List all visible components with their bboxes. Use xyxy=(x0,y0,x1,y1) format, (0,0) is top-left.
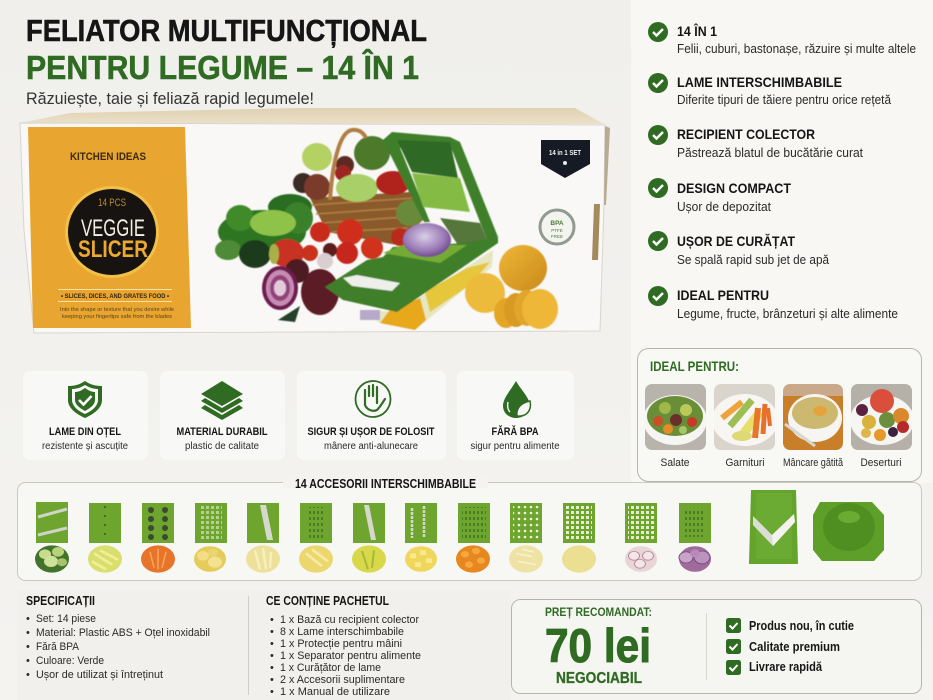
block: package contents: 1 x Separator pentru alimente xyxy=(280,650,421,662)
panel: ideal pentru xyxy=(638,348,922,482)
block: package contents xyxy=(266,594,421,698)
photo: cooked food xyxy=(783,384,843,450)
box top flap xyxy=(20,108,604,124)
card: durable material xyxy=(160,371,285,460)
box front xyxy=(20,123,605,333)
feature: collector xyxy=(648,125,864,160)
block: package contents: 8 x Lame interschimbabile xyxy=(280,626,404,638)
veggie slicer round logo xyxy=(65,186,159,278)
orange product label: keeping your fingertips safe from the blades xyxy=(62,314,173,320)
block: package contents: 1 x Curățător de lame xyxy=(280,662,381,674)
feature: 14 in 1: Felii, cuburi, bastonașe, răzuire și multe altele xyxy=(677,42,916,56)
feature: interchangeable blades xyxy=(648,73,891,107)
blade 10 xyxy=(510,503,542,543)
photo: desserts xyxy=(850,384,914,450)
panel: accessories xyxy=(18,477,922,580)
slicer lid xyxy=(383,132,498,240)
block: package contents: 1 x Bază cu recipient colector xyxy=(280,614,419,626)
food: yellow strips xyxy=(88,545,122,573)
badge: BPA PTFE free: FREE xyxy=(551,234,563,239)
feature: interchangeable blades: Diferite tipuri de tăiere pentru orice rețetă xyxy=(677,93,891,107)
negotiable label: NEGOCIABIL xyxy=(556,670,642,687)
feature: ideal for: IDEAL PENTRU xyxy=(677,287,769,303)
block: package contents: 2 x Accesorii suplimentare xyxy=(280,674,405,686)
veggie slicer round logo: SLICER xyxy=(78,236,148,263)
price value: 70 lei xyxy=(545,619,651,672)
food: yellow-green chunks xyxy=(352,545,386,573)
vegetables and basket illustration xyxy=(215,130,558,330)
title xyxy=(26,13,427,86)
block: package contents: • xyxy=(270,626,274,638)
product box photo xyxy=(20,108,610,333)
blade 7 xyxy=(353,503,385,543)
subtitle: Răzuiește, taie și feliază rapid legumele! xyxy=(26,89,314,108)
block: package contents: • xyxy=(270,650,274,662)
food: grated pale xyxy=(509,545,543,573)
panel: right column background xyxy=(631,0,933,483)
food: fine grated xyxy=(562,545,596,573)
red onions xyxy=(262,259,339,322)
purple onion xyxy=(403,223,451,257)
basket xyxy=(310,192,423,245)
basket greens xyxy=(293,136,410,202)
card: steel blades xyxy=(23,371,148,460)
card: durable material: plastic de calitate xyxy=(185,441,259,452)
feature: collector: Păstrează blatul de bucătărie curat xyxy=(677,146,864,160)
block: specifications: • xyxy=(26,669,30,681)
feature: easy to clean: UȘOR DE CURĂȚAT xyxy=(677,233,795,249)
icon: hand in circle xyxy=(356,381,390,417)
heading: ideal pentru: IDEAL PENTRU: xyxy=(650,358,739,374)
feature: ideal for xyxy=(648,286,898,321)
basket handle xyxy=(330,130,366,200)
card: safe and easy: mânere anti-alunecare xyxy=(324,441,418,452)
panel: feature cards xyxy=(23,371,574,460)
food: cubes xyxy=(405,546,437,572)
panel: specs and package xyxy=(17,590,511,700)
block: specifications: Set: 14 piese xyxy=(36,613,96,625)
food: potato slices xyxy=(194,546,226,572)
block: specifications: Culoare: Verde xyxy=(36,655,104,667)
heading: accessories: 14 ACCESORII INTERSCHIMBABILE xyxy=(295,477,476,491)
food: zucchini xyxy=(35,545,69,573)
orange product label: • SLICES, DICES, AND GRATES FOOD • xyxy=(61,293,170,300)
blade 8 xyxy=(405,503,437,543)
card: safe and easy: SIGUR ȘI UȘOR DE FOLOSIT xyxy=(308,426,435,438)
blade 6 xyxy=(300,503,332,543)
panel: price xyxy=(512,600,922,694)
block: specifications: Material: Plastic ABS + Oțel inoxidabil xyxy=(36,627,210,639)
benefit: fast delivery xyxy=(726,660,823,675)
block: specifications xyxy=(26,594,210,681)
food: onion rings xyxy=(625,546,657,572)
feature: easy to clean xyxy=(648,231,829,267)
blade 3 xyxy=(142,503,174,543)
block: specifications: • xyxy=(26,641,30,653)
label: deserturi: Deserturi xyxy=(860,457,902,469)
slicer inner block xyxy=(440,218,487,245)
blade 4 xyxy=(195,503,227,543)
badge: 14 in 1 set: 14 in 1 SET xyxy=(549,150,582,157)
block: package contents: • xyxy=(270,614,274,626)
block: specifications: Ușor de utilizat și întreținut xyxy=(36,669,163,681)
blade 5 xyxy=(247,503,279,543)
block: package contents: • xyxy=(270,674,274,686)
feature: interchangeable blades: LAME INTERSCHIMBABILE xyxy=(677,74,842,90)
box side edge xyxy=(604,126,610,205)
slicer comb xyxy=(412,173,470,212)
label: garnituri: Garnituri xyxy=(726,457,764,469)
price label: PREȚ RECOMANDAT: xyxy=(545,605,652,619)
block: specifications: • xyxy=(26,655,30,667)
feature: compact xyxy=(648,178,791,214)
block: package contents: • xyxy=(270,638,274,650)
orange product label: KITCHEN IDEAS xyxy=(70,151,146,163)
label: mancare gatita: Mâncare gătită xyxy=(783,457,844,469)
photo: side dishes xyxy=(712,384,778,450)
orange product label xyxy=(28,127,191,328)
leafy greens left xyxy=(215,194,313,268)
feature: 14 in 1 xyxy=(648,22,916,56)
blade 11 xyxy=(563,503,595,543)
label: salate: Salate xyxy=(660,457,690,469)
card: steel blades: LAME DIN OȚEL xyxy=(49,426,121,438)
title: FELIATOR MULTIFUNCȚIONAL xyxy=(26,13,427,48)
blade 1 xyxy=(36,502,68,543)
benefit: premium quality: Calitate premium xyxy=(749,640,840,654)
icon: drop with leaf xyxy=(503,381,530,418)
block: package contents: 1 x Protecție pentru mâini xyxy=(280,638,402,650)
blade 13 xyxy=(679,503,711,543)
accessory: food pusher lid xyxy=(813,502,884,561)
feature: compact: Ușor de depozitat xyxy=(677,200,771,214)
feature list xyxy=(648,22,916,321)
block: specifications: Fără BPA xyxy=(36,641,80,653)
feature: compact: DESIGN COMPACT xyxy=(677,180,791,196)
green herb xyxy=(396,200,424,226)
badge: BPA PTFE free: PTFE xyxy=(551,228,563,233)
food: orange cubes xyxy=(456,545,490,573)
blade 12 xyxy=(625,503,657,543)
blade 2 xyxy=(89,503,121,543)
veggie slicer round logo: VEGGIE xyxy=(81,215,145,242)
badge: BPA PTFE free xyxy=(540,210,574,244)
benefit: premium quality xyxy=(726,639,840,654)
food: slices xyxy=(299,545,333,573)
card: safe and easy xyxy=(297,371,446,460)
tomatoes xyxy=(269,219,409,269)
potatoes xyxy=(465,245,558,329)
feature: easy to clean: Se spală rapid sub jet de apă xyxy=(677,253,829,267)
title: PENTRU LEGUME – 14 ÎN 1 xyxy=(26,49,419,86)
block: specifications: • xyxy=(26,613,30,625)
orange product label: Into the shape or texture that you desire while xyxy=(60,307,174,313)
photo: salad xyxy=(643,384,707,450)
card: BPA free: sigur pentru alimente xyxy=(470,441,560,452)
badge: BPA PTFE free: BPA xyxy=(550,220,564,227)
blade 9 xyxy=(458,503,490,543)
icon: shield check xyxy=(68,381,102,418)
icon: layers xyxy=(201,381,243,420)
feature: ideal for: Legume, fructe, brânzeturi și alte alimente xyxy=(677,307,898,321)
block: specifications: SPECIFICAȚII xyxy=(26,594,95,608)
benefit: fast delivery: Livrare rapidă xyxy=(749,660,823,674)
block: package contents: CE CONȚINE PACHETUL xyxy=(266,594,389,608)
food: potato strips xyxy=(246,545,280,573)
card: durable material: MATERIAL DURABIL xyxy=(176,426,268,438)
card: BPA free xyxy=(457,371,574,460)
veggie slicer round logo: 14 PCS xyxy=(98,197,126,209)
accessory: hand guard with V blade xyxy=(749,490,798,564)
block: package contents: • xyxy=(270,686,274,698)
benefit: new product xyxy=(726,618,854,633)
food: purple onion xyxy=(679,546,711,572)
food: carrot xyxy=(141,545,175,573)
card: steel blades: rezistente și ascuțite xyxy=(42,441,128,452)
block: specifications: • xyxy=(26,627,30,639)
clear food container xyxy=(360,250,493,330)
benefit: new product: Produs nou, în cutie xyxy=(749,619,854,633)
badge: 14 in 1 set xyxy=(541,140,590,178)
feature: collector: RECIPIENT COLECTOR xyxy=(677,126,815,142)
feature: 14 in 1: 14 ÎN 1 xyxy=(677,22,717,39)
block: package contents: • xyxy=(270,662,274,674)
block: package contents: 1 x Manual de utilizare xyxy=(280,686,390,698)
slicer base xyxy=(325,237,498,312)
card: BPA free: FĂRĂ BPA xyxy=(492,425,539,438)
